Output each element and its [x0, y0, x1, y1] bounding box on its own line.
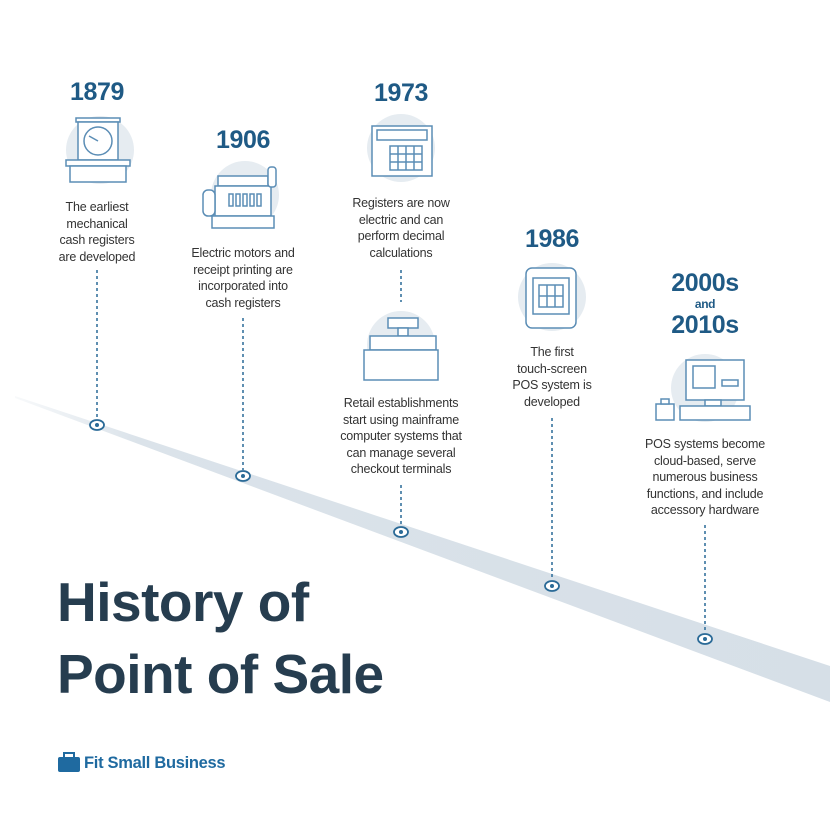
- text 1986: touch-screen: [517, 362, 587, 376]
- logo text: Fit Small Business: [84, 754, 225, 772]
- text 1906: Electric motors and: [191, 246, 295, 260]
- text 2000s: functions, and include: [647, 487, 763, 501]
- title: Point of Sale: [57, 643, 384, 705]
- year 2000s: and: [695, 297, 715, 311]
- title: [57, 571, 384, 705]
- text 1973: perform decimal: [358, 229, 444, 243]
- text 1879: The earliest: [66, 200, 128, 214]
- text 2000s: cloud-based, serve: [654, 454, 756, 468]
- text 1986: The first: [530, 345, 574, 359]
- text 1879: [59, 200, 135, 264]
- text 1973: calculations: [370, 246, 432, 260]
- text 1906: cash registers: [205, 296, 280, 310]
- text 1906: incorporated into: [198, 279, 288, 293]
- text mainframe: can manage several: [347, 446, 455, 460]
- icon: modern POS: [656, 360, 750, 420]
- text 2000s: [645, 437, 765, 517]
- text mainframe: checkout terminals: [351, 462, 451, 476]
- title: History of: [57, 571, 309, 633]
- year 2000s: 2000s: [671, 269, 739, 297]
- text 1879: mechanical: [66, 217, 128, 231]
- text 1906: receipt printing are: [193, 263, 293, 277]
- text mainframe: [340, 396, 462, 476]
- timeline band: [15, 396, 830, 702]
- text mainframe: start using mainframe: [343, 413, 459, 427]
- text mainframe: Retail establishments: [344, 396, 458, 410]
- text 2000s: accessory hardware: [651, 503, 759, 517]
- icon backgrounds: [66, 114, 739, 422]
- icon: 1973 calculator register: [372, 126, 432, 176]
- year 1879: 1879: [70, 78, 124, 106]
- icon: mainframe terminal: [364, 318, 438, 380]
- year 2000s: [671, 269, 739, 339]
- markers: [90, 420, 712, 644]
- text 2000s: POS systems become: [645, 437, 765, 451]
- text 1973: [352, 196, 450, 260]
- text 1973: electric and can: [359, 213, 443, 227]
- text mainframe: computer systems that: [340, 429, 462, 443]
- year 2000s: 2010s: [671, 311, 739, 339]
- text 2000s: numerous business: [652, 470, 758, 484]
- icon: 1879 register: [66, 118, 130, 182]
- year 1973: 1973: [374, 79, 428, 107]
- icon: 1906 register: [203, 167, 276, 228]
- year 1986: 1986: [525, 225, 579, 253]
- logo icon: briefcase: [58, 753, 80, 772]
- text 1973: Registers are now: [352, 196, 450, 210]
- text 1906: [191, 246, 295, 310]
- text 1986: developed: [524, 395, 580, 409]
- year 1906: 1906: [216, 126, 270, 154]
- text 1879: are developed: [59, 250, 135, 264]
- text 1986: POS system is: [512, 378, 592, 392]
- text 1879: cash registers: [59, 233, 134, 247]
- icon: 1986 touch-screen: [526, 268, 576, 328]
- text 1986: [512, 345, 592, 409]
